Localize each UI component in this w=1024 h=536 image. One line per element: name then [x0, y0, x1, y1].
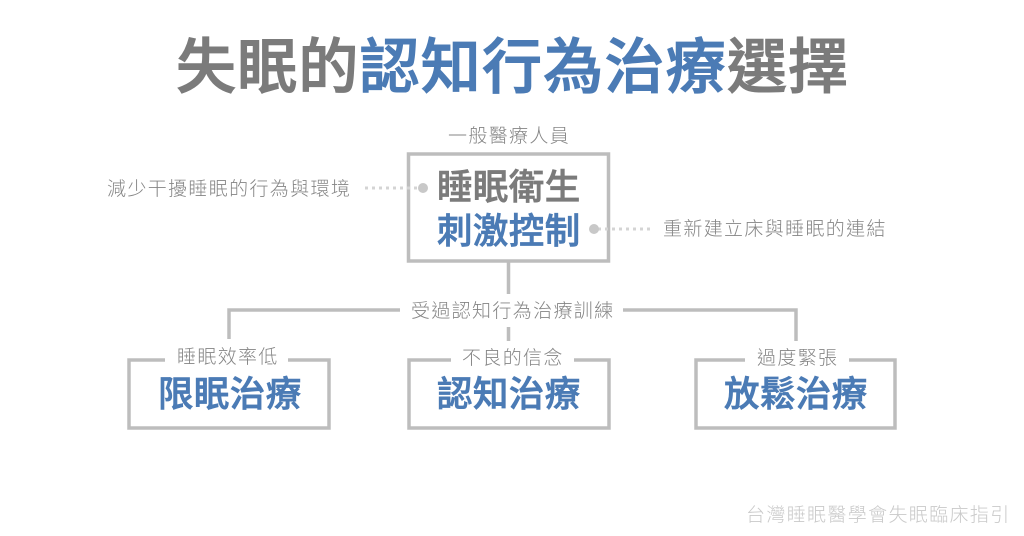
panel: cognitive therapy — [409, 347, 609, 428]
sleep hygiene label: 睡眠衛生 — [437, 167, 581, 207]
panel: sleep restriction therapy: 睡眠效率低 — [177, 346, 279, 368]
heading: general medical staff: 一般醫療人員 — [448, 125, 570, 147]
heading: CBT-I training requirement: 受過認知行為治療訓練 — [411, 300, 615, 322]
panel: cognitive therapy: 認知治療 — [437, 374, 581, 414]
panel: sleep restriction therapy: 限眠治療 — [158, 374, 302, 414]
callout: sleep hygiene description: 減少干擾睡眠的行為與環境 — [107, 178, 351, 200]
connector: tree branches — [229, 261, 796, 341]
panel: relaxation therapy: 放鬆治療 — [724, 374, 868, 414]
box outline — [408, 154, 608, 261]
title: 失眠的認知行為治療選擇 — [176, 34, 849, 101]
panel: first-line treatment box — [408, 125, 608, 261]
callout: stimulus control description: 重新建立床與睡眠的連結 — [663, 218, 887, 240]
panel: relaxation therapy — [696, 347, 895, 428]
panel: sleep restriction therapy — [129, 346, 329, 428]
source note: 台灣睡眠醫學會失眠臨床指引 — [746, 504, 1011, 526]
stimulus control label: 刺激控制 — [437, 211, 581, 251]
panel: relaxation therapy: 過度緊張 — [757, 347, 838, 369]
panel: cognitive therapy: 不良的信念 — [462, 347, 564, 369]
